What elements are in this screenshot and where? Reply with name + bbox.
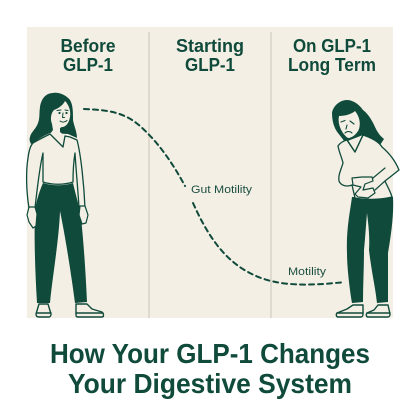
heading: before GLP-1: GLP-1 <box>63 54 113 75</box>
figure: woman holding stomach in discomfort <box>332 100 399 317</box>
right shoe <box>366 305 390 317</box>
left shoe <box>336 305 363 317</box>
heading: starting GLP-1 <box>176 35 244 75</box>
heading: starting GLP-1: Starting <box>176 35 244 56</box>
sweater <box>338 135 399 199</box>
right shoe <box>76 304 104 317</box>
heading: on GLP-1 long term <box>288 35 376 75</box>
title: How Your GLP-1 Changes <box>50 338 370 369</box>
left hand <box>27 207 37 228</box>
heading: on GLP-1 long term: Long Term <box>288 54 376 75</box>
title <box>50 338 370 399</box>
face details <box>341 120 354 133</box>
figure: healthy woman standing <box>27 93 103 317</box>
face <box>339 111 360 138</box>
title: Your Digestive System <box>68 368 352 399</box>
heading: starting GLP-1: GLP-1 <box>185 54 235 75</box>
face and neck <box>50 101 70 147</box>
heading: before GLP-1: Before <box>60 35 116 56</box>
left shoe <box>36 304 51 317</box>
hair <box>30 93 77 144</box>
panel: timeline background <box>27 27 393 318</box>
right forearm <box>373 168 385 190</box>
hair <box>332 100 384 145</box>
face details <box>57 110 68 122</box>
label: gut motility: Gut Motility <box>191 184 253 196</box>
neckline <box>347 135 363 152</box>
trousers <box>35 183 87 303</box>
label: motility: Motility <box>288 266 327 278</box>
sweater and arms <box>27 134 85 208</box>
heading: before GLP-1 <box>60 35 116 75</box>
hands on stomach <box>352 177 375 198</box>
heading: on GLP-1 long term: On GLP-1 <box>293 35 371 56</box>
chart: gut motility dashed curve <box>84 109 345 285</box>
trousers <box>347 197 393 303</box>
right hand <box>79 206 88 224</box>
